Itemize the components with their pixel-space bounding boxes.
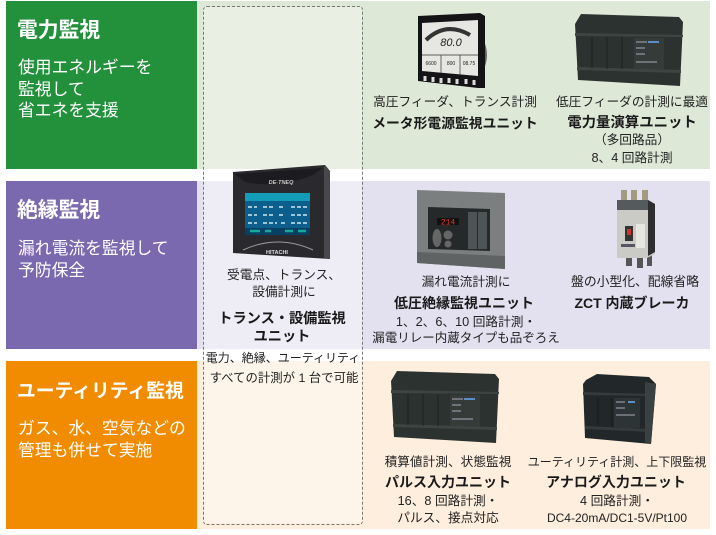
device: meter type power monitoring unit: 80.0: [440, 37, 463, 49]
caption: transformer unit usage line 2: 設備計測に: [252, 285, 316, 299]
caption: leakage current: 漏れ電流計測に: [422, 275, 510, 289]
device: analog input unit: [583, 374, 656, 444]
name: transformer unit line 2: ユニット: [254, 329, 310, 345]
caption: accumulated value: 積算値計測、状態監視: [385, 455, 511, 469]
name: pulse input unit: パルス入力ユニット: [385, 474, 511, 490]
name: analog input unit: アナログ入力ユニット: [546, 474, 686, 490]
note: analog inputs: DC4-20mA/DC1-5V/Pt100: [547, 511, 687, 525]
text: utility description: ガス、水、空気などの: [18, 419, 186, 438]
device: low voltage insulation monitoring unit: [417, 190, 505, 269]
heading: utility monitoring: ユーティリティ監視: [17, 380, 184, 401]
note: analog circuits: 4 回路計測・: [580, 494, 654, 508]
text: power description: 監視して: [18, 80, 85, 98]
note: relay type: 漏電リレー内蔵タイプも品ぞろえ: [372, 331, 560, 345]
note: multi circuit: （多回路品）: [594, 133, 670, 147]
device: ZCT breaker: [617, 190, 655, 268]
band: utility background: [197, 361, 710, 529]
center column wash: insulation: [203, 181, 362, 349]
name: meter type unit: メータ形電源監視ユニット: [372, 116, 538, 131]
panel: utility monitoring: [6, 361, 197, 529]
device: meter type power monitoring unit: 08.75: [463, 61, 475, 67]
name: ZCT breaker: ZCT 内蔵ブレーカ: [574, 295, 690, 311]
note: all measurement on one unit: 電力、絶縁、ユーティリティ: [206, 351, 360, 365]
center column wash: power: [203, 7, 362, 169]
caption: high voltage feeder: 高圧フィーダ、トランス計測: [373, 95, 537, 109]
text: utility description: [18, 419, 186, 460]
text: power description: [18, 58, 152, 120]
text: insulation description: 予防保全: [18, 260, 85, 280]
caption: low voltage feeder: 低圧フィーダの計測に最適: [556, 95, 708, 109]
name: insulation unit: 低圧絶縁監視ユニット: [394, 295, 534, 311]
device: transformer and equipment monitoring unit: HITACHI: [266, 250, 288, 256]
caption: transformer unit usage: 受電点、トランス、: [227, 268, 341, 282]
dashed frame: center column: [203, 6, 363, 525]
band: insulation background: [197, 181, 710, 349]
device: meter type power monitoring unit: 800: [447, 61, 455, 67]
text: insulation description: 漏れ電流を監視して: [18, 239, 169, 258]
text: insulation description: [18, 239, 169, 280]
device: low voltage insulation monitoring unit: 214: [441, 218, 455, 228]
device: meter type power monitoring unit: 6600: [425, 61, 437, 67]
panel: power monitoring: [6, 1, 197, 169]
device: pulse input unit: [391, 371, 499, 443]
name: transformer and equipment monitoring unit: トランス・設備監視: [218, 311, 346, 327]
note: pulse circuits: 16、8 回路計測・: [398, 494, 498, 508]
band: power background: [197, 1, 710, 169]
heading: insulation monitoring: 絶縁監視: [17, 199, 100, 222]
note line 2: すべての計測が 1 台で可能: [210, 371, 358, 385]
note background: [204, 349, 361, 361]
caption: utility measurement: ユーティリティ計測、上下限監視: [528, 455, 706, 469]
name: power calculation unit: 電力量演算ユニット: [567, 115, 697, 131]
device: transformer and equipment monitoring unit: [233, 165, 330, 259]
text: power description: 省エネを支援: [18, 101, 119, 120]
note: pulse contact: パルス、接点対応: [397, 511, 499, 525]
device: power calculation unit: [575, 14, 683, 86]
text: utility description: 管理も併せて実施: [18, 440, 152, 460]
device: transformer and equipment monitoring unit: DE-TNEQ: [269, 180, 294, 186]
note: circuit count: 1、2、6、10 回路計測・: [396, 315, 536, 329]
heading: power monitoring: 電力監視: [17, 19, 100, 42]
device: meter type power monitoring unit: [418, 13, 487, 88]
caption: compact panel: 盤の小型化、配線省略: [571, 274, 699, 289]
panel: insulation monitoring: [6, 181, 197, 349]
center column wash: utility: [203, 361, 362, 523]
text: power description: 使用エネルギーを: [18, 58, 152, 77]
note: circuit count: 8、4 回路計測: [591, 151, 673, 165]
